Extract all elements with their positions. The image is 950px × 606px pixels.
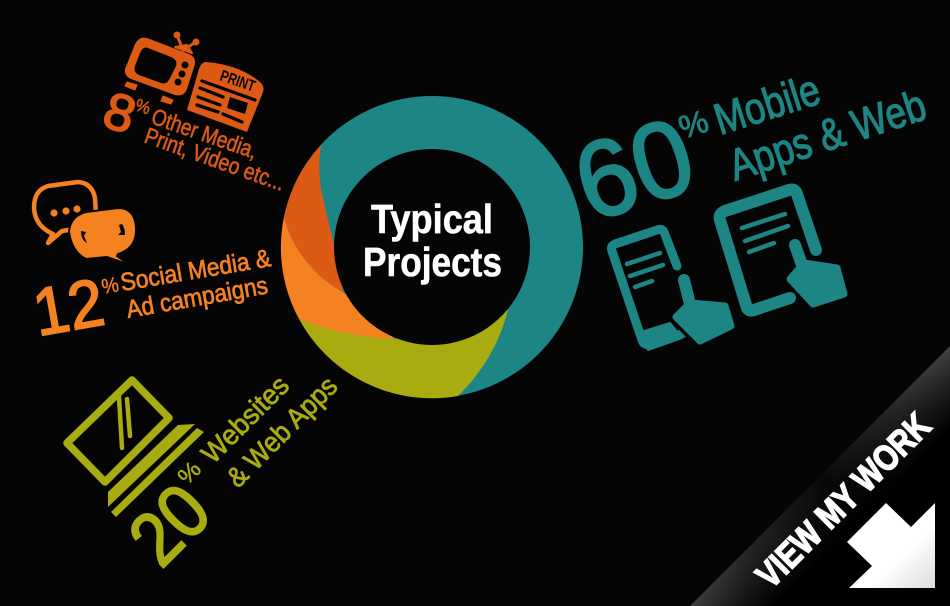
label: 8% other media: Other Media, xyxy=(148,103,261,164)
label: 12% social media: % xyxy=(100,273,121,299)
icon: tablet with hand xyxy=(720,190,845,311)
label: 8% other media xyxy=(96,81,289,196)
label: 60% mobile apps and web xyxy=(561,65,932,244)
label: 20% websites and web apps xyxy=(113,370,343,582)
label: 12% social media xyxy=(28,244,273,351)
label: 60% mobile apps and web: Mobile xyxy=(708,65,826,145)
label: 8% other media: Print, Video etc... xyxy=(141,122,289,196)
label: 12% social media: 12 xyxy=(28,265,110,351)
label: 20% websites and web apps: & Web Apps xyxy=(220,370,343,493)
icon: television xyxy=(125,32,200,104)
label: 60% mobile apps and web: % xyxy=(674,103,713,146)
icon: print newspaper: PRINT xyxy=(218,68,257,96)
label: 8% other media: 8 xyxy=(96,81,143,146)
segment: other media 8% xyxy=(284,145,343,292)
corner banner xyxy=(690,346,950,606)
label: 20% websites and web apps: % xyxy=(172,456,206,490)
arrow xyxy=(847,503,935,588)
label: 60% mobile apps and web: 60 xyxy=(561,94,708,244)
label: 8% other media: % xyxy=(133,95,153,118)
label: 20% websites and web apps: 20 xyxy=(113,468,227,582)
title: Projects xyxy=(363,239,502,285)
donut centre xyxy=(334,149,530,345)
segment: websites 20% xyxy=(299,310,508,398)
donut chart xyxy=(281,96,583,398)
icon: print newspaper xyxy=(187,62,264,132)
title xyxy=(363,196,502,285)
label: 20% websites and web apps: Websites xyxy=(195,370,295,469)
label: 12% social media: Ad campaigns xyxy=(124,272,270,324)
segment: social media 12% xyxy=(281,217,395,339)
icon: phone with hand xyxy=(611,229,733,350)
title: Typical xyxy=(371,196,493,242)
icon: chat bubbles xyxy=(34,182,136,265)
label: 12% social media: Social Media & xyxy=(118,244,273,297)
icon: laptop xyxy=(67,380,204,517)
